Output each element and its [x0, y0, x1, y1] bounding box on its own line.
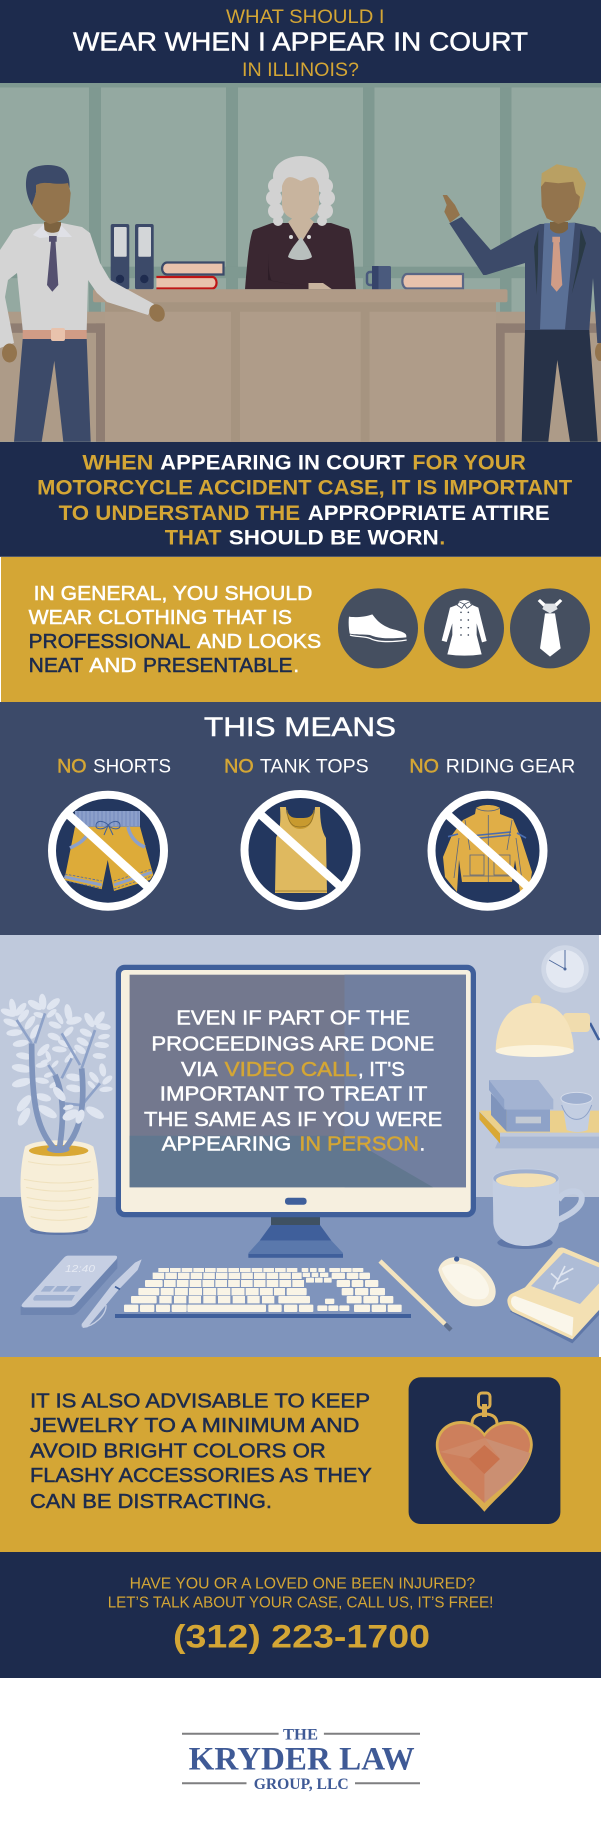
judge — [245, 156, 356, 289]
jewelry text: IT IS ALSO ADVISABLE TO KEEP — [30, 1389, 370, 1412]
statement line 1: FOR YOUR — [412, 451, 526, 474]
panel: jewelry advice — [0, 1357, 601, 1552]
logo: GROUP, LLC — [254, 1776, 349, 1793]
advice text: PRESENTABLE — [143, 655, 292, 677]
icon: pencil — [380, 1261, 451, 1330]
statement line 1 — [82, 451, 526, 474]
cta text: LET’S TALK ABOUT YOUR CASE, CALL US, IT’S FREE! — [108, 1594, 493, 1611]
advice text: . — [294, 655, 299, 677]
statement line 1: APPEARING IN COURT — [160, 451, 405, 474]
statement line 3: TO UNDERSTAND THE — [59, 502, 300, 525]
icon: coat — [424, 588, 504, 668]
jewelry text: CAN BE DISTRACTING. — [30, 1490, 272, 1513]
cta text — [108, 1575, 493, 1611]
message text: IMPORTANT TO TREAT IT — [160, 1083, 428, 1106]
jewelry text: AVOID BRIGHT COLORS OR — [30, 1439, 326, 1462]
logo: KRYDER LAW — [189, 1741, 415, 1777]
message text: VIA — [181, 1058, 218, 1081]
panel: video call desk scene — [0, 935, 601, 1357]
icon: tie — [510, 588, 590, 668]
icon: heart pendant — [409, 1377, 560, 1524]
panel: courtroom illustration — [0, 83, 601, 442]
statement line 2: MOTORCYCLE ACCIDENT CASE, IT IS IMPORTANT — [37, 477, 572, 500]
monitor with message — [116, 965, 476, 1258]
jewelry text — [30, 1389, 372, 1513]
icon: book — [507, 1247, 599, 1343]
panel: header — [0, 0, 601, 83]
label: no shorts: SHORTS — [93, 757, 171, 778]
label: no riding gear: NO — [409, 757, 439, 778]
panel: general advice — [0, 556, 601, 702]
icon: plant — [0, 993, 114, 1235]
shelf with box and cup — [479, 1080, 599, 1148]
message text: EVEN IF PART OF THE — [176, 1007, 410, 1030]
message text — [144, 1007, 442, 1156]
logo: THE — [283, 1726, 318, 1743]
message text: PROCEEDINGS ARE DONE — [151, 1033, 434, 1056]
icon: no shorts — [52, 795, 164, 907]
logo — [182, 1726, 420, 1793]
advice text — [29, 583, 321, 677]
message text: VIDEO CALL — [225, 1058, 357, 1081]
message text: APPEARING — [162, 1133, 291, 1156]
statement line 4: THAT — [165, 527, 222, 550]
jewelry text: JEWELRY TO A MINIMUM AND — [30, 1414, 360, 1437]
message text: THE SAME AS IF YOU WERE — [144, 1108, 442, 1131]
statement line 4: SHOULD BE WORN — [229, 527, 439, 550]
advice text: WEAR CLOTHING THAT IS — [29, 607, 292, 629]
advice text: AND — [89, 655, 136, 677]
label: no riding gear: RIDING GEAR — [446, 757, 575, 778]
icon: shoe — [338, 588, 418, 668]
statement line 3: APPROPRIATE ATTIRE — [308, 502, 550, 525]
statement line 4: . — [439, 527, 445, 550]
panel: statement — [0, 442, 601, 557]
statement line 4 — [165, 527, 445, 550]
label: no shorts: NO — [57, 757, 87, 778]
advice text: AND LOOKS — [197, 631, 321, 653]
title: in Illinois: IN ILLINOIS? — [242, 60, 359, 81]
icon: keyboard — [115, 1268, 411, 1318]
label: no shorts — [57, 757, 171, 778]
title: main line: WEAR WHEN I APPEAR IN COURT — [73, 27, 528, 57]
advice text: NEAT — [29, 655, 83, 677]
icon: no riding gear — [432, 795, 544, 907]
desk — [93, 289, 508, 442]
right man — [443, 164, 601, 442]
label: no tank tops: NO — [224, 757, 254, 778]
icon: clock — [541, 945, 589, 993]
heading: this means: THIS MEANS — [204, 712, 396, 742]
panel: this means — [0, 702, 601, 935]
binders — [111, 224, 154, 289]
icon: phone — [21, 1256, 117, 1315]
icon: no tank tops — [244, 794, 356, 906]
panel: call to action — [0, 1552, 601, 1678]
advice text: IN GENERAL, YOU SHOULD — [34, 583, 312, 605]
advice text: PROFESSIONAL — [29, 631, 191, 653]
jewelry text: FLASHY ACCESSORIES AS THEY — [30, 1464, 372, 1487]
left man — [0, 165, 168, 442]
phone number: (312) 223-1700 — [173, 1619, 430, 1655]
cta text: HAVE YOU OR A LOVED ONE BEEN INJURED? — [130, 1575, 476, 1592]
mug and book right — [367, 266, 463, 290]
icon: pen — [82, 1259, 142, 1327]
message text: , IT'S — [358, 1058, 405, 1081]
icon: mouse — [438, 1256, 496, 1306]
icon: lamp — [496, 995, 599, 1057]
statement line 3 — [59, 502, 550, 525]
icon: coffee mug — [492, 1168, 582, 1249]
text: phone clock: 12:40 — [65, 1264, 96, 1275]
statement line 1: WHEN — [82, 451, 153, 474]
title: what should I: WHAT SHOULD I — [226, 7, 384, 28]
message text: . — [420, 1133, 425, 1156]
books left — [156, 262, 224, 288]
label: no tank tops: TANK TOPS — [260, 757, 369, 778]
message text: IN PERSON — [299, 1133, 419, 1156]
